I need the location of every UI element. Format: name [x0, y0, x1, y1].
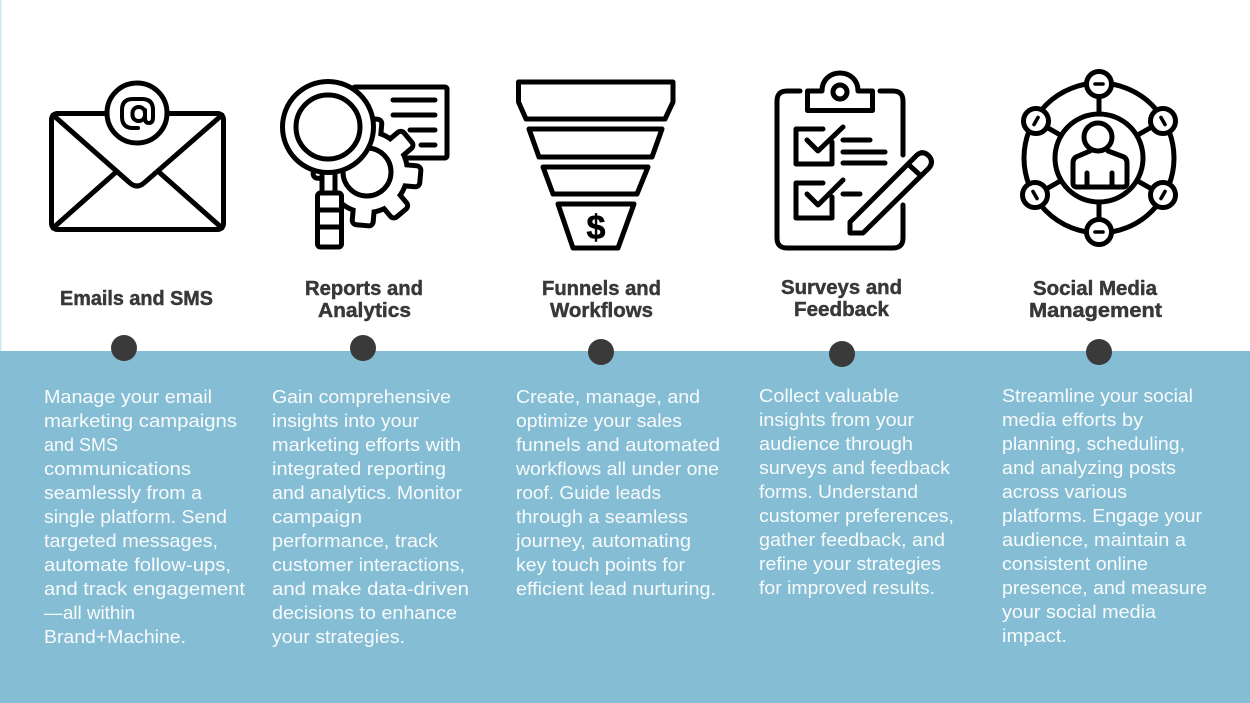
text block: Reports and Analytics description: and analytics. Monitor [272, 482, 462, 503]
timeline dot: Reports and Analytics [350, 335, 376, 361]
text block: Social Media Management description: planning, scheduling, [1002, 433, 1185, 454]
text block: Emails and SMS description [44, 386, 245, 647]
text block: Reports and Analytics description: decisions to enhance [272, 602, 457, 623]
text block: Surveys and Feedback description [759, 385, 954, 598]
text block: Funnels and Workflows description: journey, automating [515, 530, 691, 551]
text block: Reports and Analytics description: insights into your [272, 410, 419, 431]
text block: Emails and SMS description: seamlessly from a [44, 482, 203, 503]
icon: sales funnel: $ [587, 209, 606, 247]
timeline dot: Surveys and Feedback [829, 341, 855, 367]
text block: Funnels and Workflows description: through a seamless [516, 506, 688, 527]
icon: social network around a person [1022, 72, 1176, 244]
heading: Social Media Management: Management [1029, 300, 1162, 322]
text block: Social Media Management description [1002, 385, 1207, 646]
heading: Social Media Management [1029, 278, 1162, 322]
text block: Surveys and Feedback description: Collect valuable [759, 385, 899, 406]
text block: Social Media Management description: impact. [1002, 625, 1067, 646]
text block: Surveys and Feedback description: gather feedback, and [759, 529, 945, 550]
heading: Social Media Management: Social Media [1033, 278, 1158, 300]
text block: Surveys and Feedback description: audience through [759, 433, 913, 454]
heading: Funnels and Workflows [542, 278, 661, 322]
text block: Reports and Analytics description: marketing efforts with [272, 434, 461, 455]
text block: Social Media Management description: Streamline your social [1002, 385, 1193, 406]
icon: clipboard with checklist and pencil [777, 73, 932, 248]
text block: Emails and SMS description: Manage your email [44, 386, 212, 407]
text block: Reports and Analytics description: and make data-driven [272, 578, 469, 599]
text block: Reports and Analytics description: your strategies. [272, 626, 405, 647]
text block: Emails and SMS description: targeted messages, [44, 530, 218, 551]
heading: Surveys and Feedback [781, 277, 902, 321]
heading: Funnels and Workflows: Funnels and [542, 278, 661, 300]
text block: Social Media Management description: your social media [1002, 601, 1157, 622]
text block: Emails and SMS description: automate follow-ups, [44, 554, 231, 575]
text block: Emails and SMS description: and SMS [44, 434, 118, 455]
text block: Funnels and Workflows description: roof. Guide leads [516, 482, 661, 503]
text block: Surveys and Feedback description: for improved results. [759, 577, 935, 598]
text block: Social Media Management description: media efforts by [1002, 409, 1144, 430]
timeline dot: Funnels and Workflows [588, 339, 614, 365]
heading: Surveys and Feedback: Surveys and [781, 277, 902, 299]
text block: Emails and SMS description: Brand+Machine. [44, 626, 186, 647]
text block: Funnels and Workflows description [515, 386, 720, 599]
text block: Emails and SMS description: and track engagement [44, 578, 245, 599]
text block: Social Media Management description: platforms. Engage your [1002, 505, 1202, 526]
text block: Social Media Management description: presence, and measure [1002, 577, 1207, 598]
text block: Surveys and Feedback description: forms. Understand [759, 481, 918, 502]
text block: Reports and Analytics description: Gain comprehensive [272, 386, 451, 407]
text block: Emails and SMS description: —all within [44, 602, 135, 623]
text block: Reports and Analytics description [272, 386, 469, 647]
heading: Funnels and Workflows: Workflows [550, 300, 653, 322]
text block: Surveys and Feedback description: refine your strategies [759, 553, 941, 574]
text block: Funnels and Workflows description: efficient lead nurturing. [516, 578, 716, 599]
text block: Emails and SMS description: single platform. Send [44, 506, 227, 527]
text block: Social Media Management description: consistent online [1002, 553, 1148, 574]
text block: Surveys and Feedback description: surveys and feedback [759, 457, 951, 478]
text block: Funnels and Workflows description: Create, manage, and [516, 386, 700, 407]
heading: Emails and SMS: Emails and SMS [60, 288, 213, 310]
heading: Surveys and Feedback: Feedback [794, 299, 890, 321]
text block: Social Media Management description: audience, maintain a [1002, 529, 1187, 550]
text block: Reports and Analytics description: performance, track [272, 530, 439, 551]
text block: Surveys and Feedback description: insights from your [759, 409, 914, 430]
text block: Funnels and Workflows description: workflows all under one [515, 458, 719, 479]
text block: Reports and Analytics description: integrated reporting [272, 458, 446, 479]
text block: Funnels and Workflows description: funnels and automated [516, 434, 720, 455]
text block: Reports and Analytics description: customer interactions, [272, 554, 465, 575]
heading: Reports and Analytics: Analytics [318, 300, 411, 322]
text block: Social Media Management description: across various [1002, 481, 1127, 502]
text block: Funnels and Workflows description: key touch points for [516, 554, 685, 575]
heading: Reports and Analytics [305, 278, 423, 322]
text block: Emails and SMS description: marketing campaigns [44, 410, 237, 431]
text block: Social Media Management description: and analyzing posts [1002, 457, 1176, 478]
text block: Emails and SMS description: communications [44, 458, 191, 479]
text block: Surveys and Feedback description: customer preferences, [759, 505, 954, 526]
panel: blue band [0, 351, 1250, 703]
text block: Reports and Analytics description: campaign [272, 506, 362, 527]
icon: envelope with at sign [52, 83, 224, 230]
timeline dot: Emails and SMS [111, 335, 137, 361]
heading: Reports and Analytics: Reports and [305, 278, 423, 300]
text block: Funnels and Workflows description: optimize your sales [516, 410, 682, 431]
timeline dot: Social Media Management [1086, 339, 1112, 365]
icon: magnifier, gear and report [282, 82, 447, 247]
icon: sales funnel [518, 82, 673, 248]
